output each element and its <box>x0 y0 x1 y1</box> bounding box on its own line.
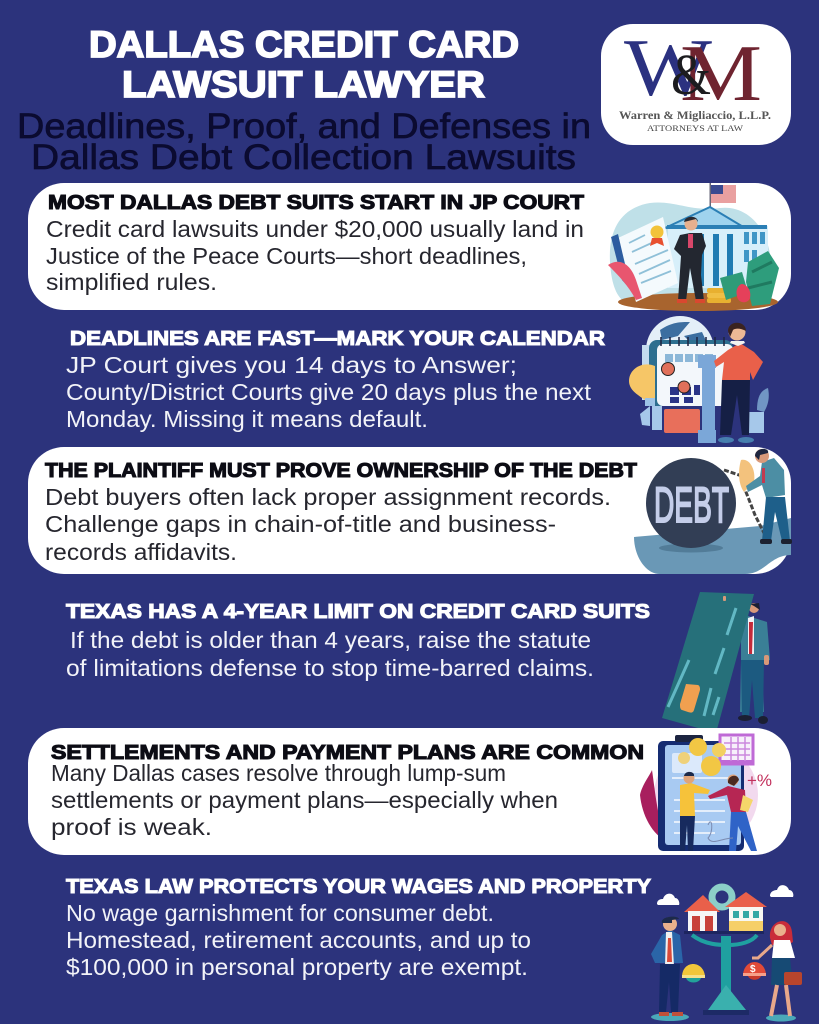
text: ownership proof: records affidavits. <box>45 539 237 565</box>
logo badge: & <box>671 42 711 107</box>
text: deadlines: JP Court gives you 14 days to Answer; <box>66 352 517 378</box>
heading: protections: TEXAS LAW PROTECTS YOUR WAGES AND PROPERTY <box>66 876 652 898</box>
icon: scale with houses and people: $ <box>750 964 756 975</box>
title <box>89 24 519 105</box>
text: JP court <box>46 216 584 295</box>
section: four-year limit <box>66 592 770 733</box>
section: protections <box>66 876 802 1022</box>
text: ownership proof <box>45 484 611 565</box>
icon: settlement handshake on clipboard: +% <box>747 771 772 790</box>
heading: four-year limit: TEXAS HAS A 4-YEAR LIMIT ON CREDIT CARD SUITS <box>66 601 650 623</box>
panel: ownership proof <box>28 447 792 574</box>
text: ownership proof: Debt buyers often lack proper assignment records. <box>45 484 611 510</box>
text: four-year limit <box>66 627 594 681</box>
text: protections: Homestead, retirement accounts, and up to <box>66 927 531 953</box>
icon: calendar and person <box>629 316 769 443</box>
section: deadlines <box>66 316 769 443</box>
text: JP court: Credit card lawsuits under $20,000 usually land in <box>46 216 584 242</box>
text: four-year limit: of limitations defense to stop time-barred claims. <box>66 655 594 681</box>
text: deadlines: Monday. Missing it means default. <box>66 406 428 432</box>
text: JP court: Justice of the Peace Courts—short deadlines, <box>46 243 527 269</box>
text: protections: $100,000 in personal property are exempt. <box>66 954 528 980</box>
title: DALLAS CREDIT CARD <box>89 24 519 65</box>
heading: JP court: MOST DALLAS DEBT SUITS START IN JP COURT <box>48 192 584 214</box>
heading: settlements: SETTLEMENTS AND PAYMENT PLANS ARE COMMON <box>51 742 644 764</box>
text: deadlines: County/District Courts give 20 days plus the next <box>66 379 592 405</box>
subtitle: Dallas Debt Collection Lawsuits <box>31 138 576 177</box>
text: settlements: proof is weak. <box>51 814 212 840</box>
icon: debt ball and chain <box>634 449 792 574</box>
text: deadlines <box>66 352 592 432</box>
subtitle: Deadlines, Proof, and Defenses in <box>17 107 591 146</box>
logo badge: M <box>680 30 762 118</box>
title: LAWSUIT LAWYER <box>122 64 485 105</box>
heading: deadlines: DEADLINES ARE FAST—MARK YOUR CALENDAR <box>70 328 606 350</box>
text: ownership proof: Challenge gaps in chain-of-title and business- <box>45 511 556 537</box>
text: JP court: simplified rules. <box>46 269 217 295</box>
icon: person holding credit card <box>662 592 770 733</box>
logo badge: W <box>624 22 713 113</box>
icon: courthouse with lawyer and money <box>608 183 779 311</box>
logo badge: Warren & Migliaccio, L.L.P. <box>619 110 771 122</box>
icon: scale with houses and people <box>651 885 802 1022</box>
text: settlements: Many Dallas cases resolve through lump-sum <box>51 760 506 786</box>
text: settlements: settlements or payment plans—especially when <box>51 787 558 813</box>
subtitle <box>17 107 591 177</box>
panel: JP court <box>28 183 791 311</box>
logo badge: ATTORNEYS AT LAW <box>647 123 743 133</box>
panel: settlements <box>28 728 791 855</box>
heading: ownership proof: THE PLAINTIFF MUST PROVE OWNERSHIP OF THE DEBT <box>45 460 637 482</box>
text: four-year limit: If the debt is older than 4 years, raise the statute <box>70 627 591 653</box>
logo badge <box>601 22 791 145</box>
text: settlements <box>51 760 558 840</box>
text: protections <box>66 900 531 980</box>
icon: debt ball and chain: DEBT <box>654 477 729 533</box>
icon: settlement handshake on clipboard <box>640 735 772 851</box>
text: protections: No wage garnishment for consumer debt. <box>66 900 494 926</box>
